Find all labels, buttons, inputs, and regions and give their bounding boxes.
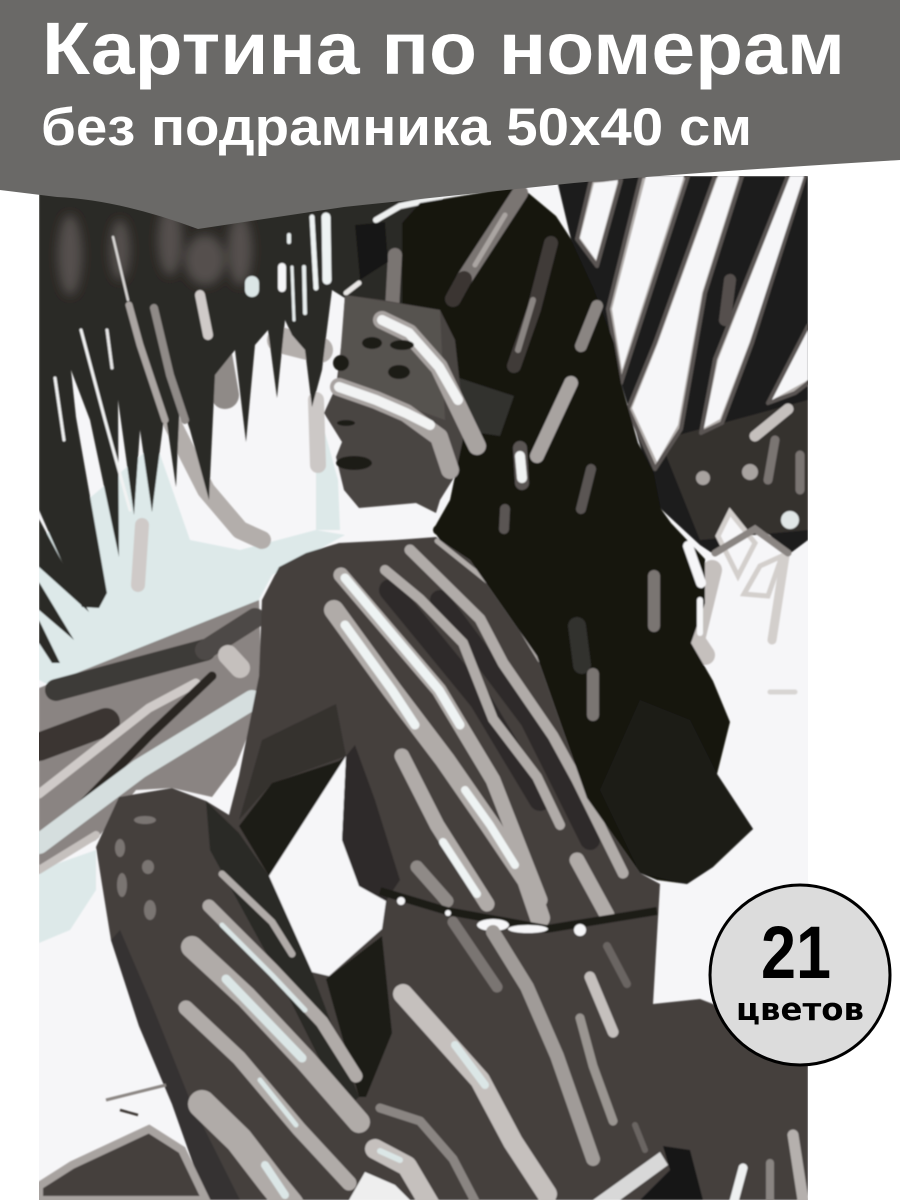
bottom shell pieces [349, 1172, 410, 1200]
frond blotches [58, 205, 252, 295]
inner leg shade [111, 930, 240, 1200]
knee spots [115, 816, 156, 920]
face light bands [339, 320, 477, 470]
badge: 21 colours: цветов [736, 992, 864, 1028]
title: Картина по номерам [42, 7, 845, 90]
dark wedge [326, 936, 392, 1097]
belt beads [397, 897, 586, 936]
belt [380, 891, 657, 929]
lattice details [696, 280, 800, 529]
lower hair tone [600, 700, 753, 884]
header banner [0, 0, 900, 229]
lower frond spikes [39, 519, 89, 663]
badge: 21 colours [710, 885, 890, 1065]
side of torso shading [342, 745, 400, 901]
arm/leg gap [269, 756, 386, 976]
lattice dark patch [660, 400, 808, 540]
near-black patch by hair [355, 222, 388, 280]
lower left frond [39, 600, 262, 868]
back of neck dark edge [433, 525, 443, 535]
hair [402, 186, 753, 884]
forehead tone [338, 295, 445, 420]
palm fronds upper left [39, 190, 440, 608]
leg stripes [186, 874, 359, 1200]
leg shading [206, 801, 359, 1110]
below belt stripes [375, 922, 645, 1200]
badge: 21 colours: 21 [761, 911, 831, 994]
right palm frond background [556, 176, 808, 555]
hair light strands [453, 193, 701, 715]
arm and torso [96, 537, 808, 1200]
frond highlights [55, 198, 439, 510]
gray halo of fronds [138, 320, 320, 585]
bottom left ground [39, 1129, 206, 1200]
veins [695, 529, 795, 692]
arm shadow [239, 756, 346, 876]
subtitle: без подрамника 50х40 см [41, 98, 752, 157]
facial features [333, 337, 414, 470]
hair lower shade patch [453, 376, 514, 436]
painting: woman in palm shadows [39, 176, 808, 1200]
white panes [718, 512, 782, 596]
face and neck [324, 295, 465, 513]
pale blue sky tint [39, 400, 345, 943]
bottom right details [733, 1135, 803, 1200]
back stripes [334, 541, 623, 918]
dark stripes on back [390, 590, 590, 840]
right frond stripes [577, 176, 808, 469]
